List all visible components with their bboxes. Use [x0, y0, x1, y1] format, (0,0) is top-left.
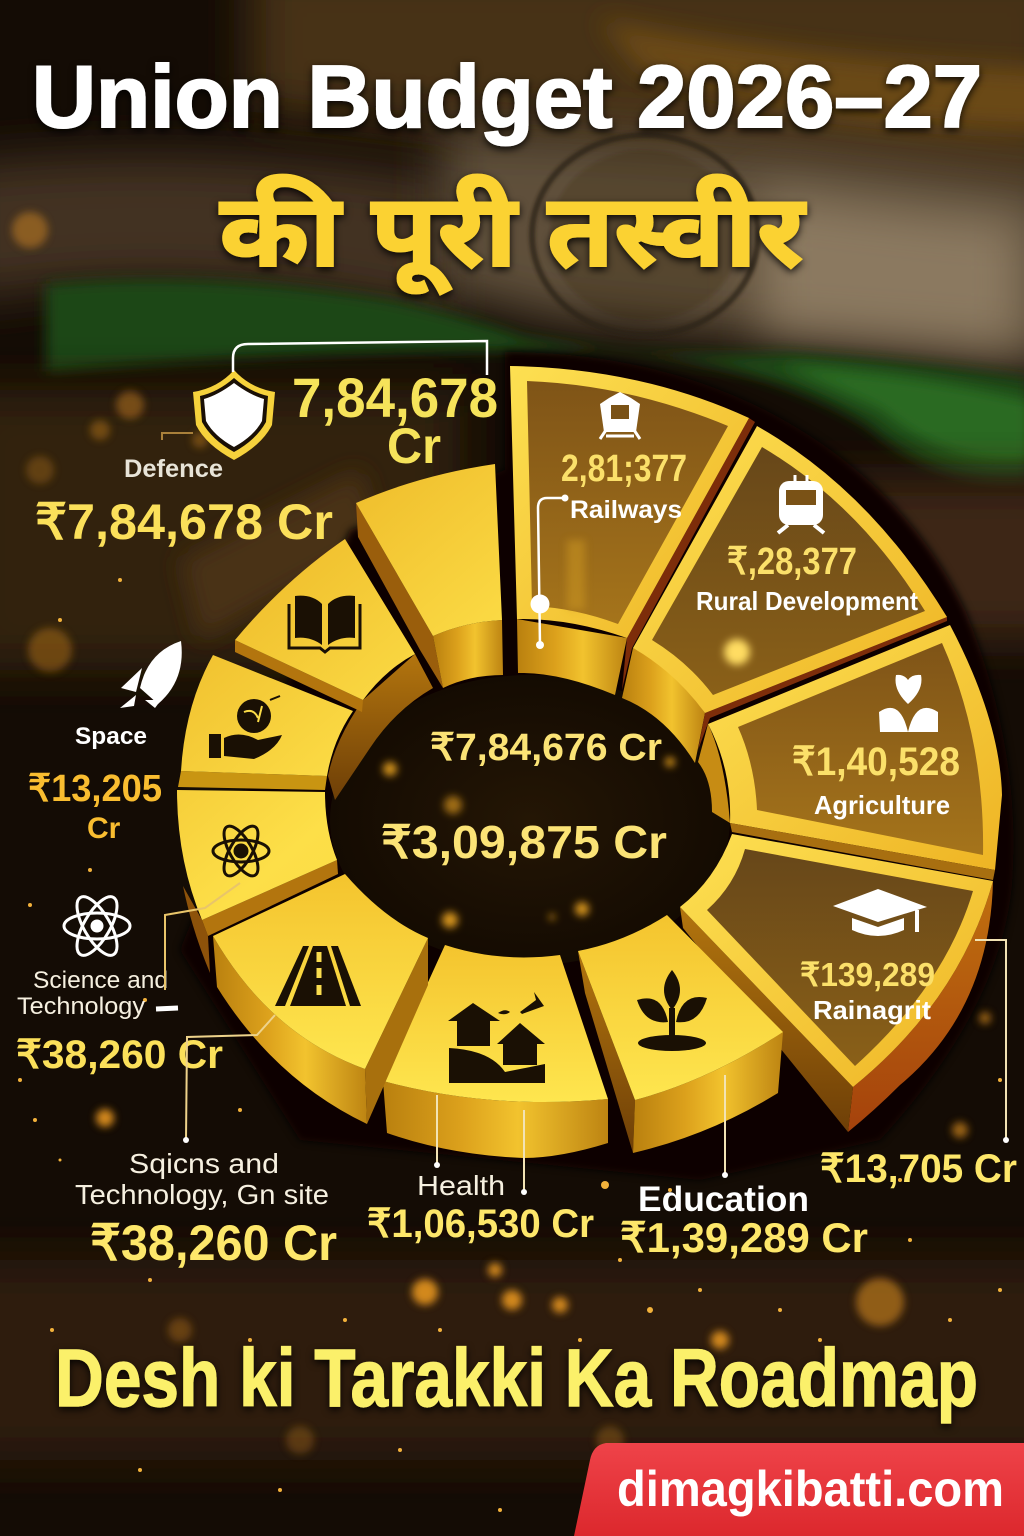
Defence top value: Cr: [387, 418, 441, 474]
Education label and value: ₹1,39,289 Cr: [620, 1214, 868, 1261]
centre sparks: [383, 757, 675, 928]
icon: hand with globe: [209, 696, 282, 759]
Education label and value: Education: [638, 1180, 809, 1219]
Grad cap icon and labels: [800, 889, 935, 1025]
segment: plant: [578, 915, 783, 1153]
Space label and value: [28, 723, 162, 845]
Squicns label: Sqicns and: [129, 1148, 279, 1179]
icon: book: [289, 596, 360, 652]
Defence top value: 7,84,678: [292, 366, 498, 429]
connector lines and dots: [156, 433, 1009, 1195]
Space label and value: ₹13,205: [28, 768, 162, 810]
icon: rocket: [120, 641, 182, 708]
Agriculture icon and labels: [792, 675, 960, 820]
Space label and value: Cr: [87, 812, 121, 845]
website badge: [574, 1443, 1024, 1536]
segment: Agriculture: [698, 625, 1002, 880]
Space label and value: Space: [75, 723, 147, 750]
donut chart: [177, 352, 1014, 1180]
centre values: ₹3,09,875 Cr: [381, 816, 667, 868]
subtitle: Hindi heading: की पूरी तस्वीर: [220, 174, 807, 295]
segment: book: [235, 539, 433, 800]
Science and Technology label: Technology: [17, 993, 145, 1020]
Health label and value: [367, 1170, 594, 1246]
Rural Development icon and labels: ₹,28,377: [727, 541, 857, 583]
icon: sprout: [637, 970, 707, 1051]
centre values: ₹7,84,676 Cr: [430, 727, 662, 769]
Education label and value: [620, 1180, 868, 1261]
Squicns value: ₹38,260 Cr: [90, 1215, 337, 1271]
Rural Development icon and labels: Rural Development: [696, 586, 918, 616]
Railways icon and labels: [530, 392, 687, 649]
icon: shield: [193, 370, 275, 460]
decorative ashoka chakra: [532, 135, 758, 335]
icon: houses: [448, 992, 545, 1083]
right value: ₹13,705 Cr: [820, 1147, 1017, 1191]
Defence top value: [292, 366, 498, 474]
Defence label: Defence: [124, 455, 223, 483]
website badge: dimagkibatti.com: [617, 1461, 1004, 1517]
segment: Rural Development: [622, 426, 947, 763]
segment: Defence: [356, 464, 503, 688]
title: Union Budget 2026-27: Union Budget 2026–27: [32, 47, 982, 146]
Grad cap icon and labels: Rainagrit: [813, 995, 931, 1025]
segment: road: [213, 874, 428, 1124]
Grad cap icon and labels: ₹139,289: [800, 956, 935, 993]
Science and Technology label: Science and: [33, 967, 168, 994]
Railways icon and labels: Railways: [570, 496, 682, 524]
segment: Education (grad cap): [680, 834, 993, 1132]
icon: road: [275, 946, 361, 1006]
Health label and value: ₹1,06,530 Cr: [367, 1202, 594, 1246]
icon: atom outline: [64, 891, 130, 961]
segment: housing: [383, 945, 608, 1158]
centre values: [381, 727, 667, 868]
segment: space hand: [178, 655, 353, 790]
Science and Technology label: [17, 967, 168, 1020]
Health label and value: Health: [417, 1170, 505, 1201]
Science value: ₹38,260 Cr: [16, 1033, 223, 1077]
segment: Railways: [510, 366, 755, 695]
donut shadow: [180, 352, 1014, 1180]
Squicns label: [75, 1148, 329, 1210]
centre hole: [330, 675, 730, 965]
Defence value: ₹7,84,678 Cr: [35, 494, 333, 550]
Squicns label: Technology, Gn site: [75, 1179, 329, 1210]
Agriculture icon and labels: ₹1,40,528: [792, 740, 960, 784]
segment: science atom: [177, 790, 338, 973]
Agriculture icon and labels: Agriculture: [814, 790, 950, 820]
connector: Defence: [233, 341, 487, 375]
Rural Development icon and labels: [696, 475, 918, 665]
icon: atom: [213, 821, 269, 881]
Railways icon and labels: 2,81;377: [561, 448, 687, 490]
